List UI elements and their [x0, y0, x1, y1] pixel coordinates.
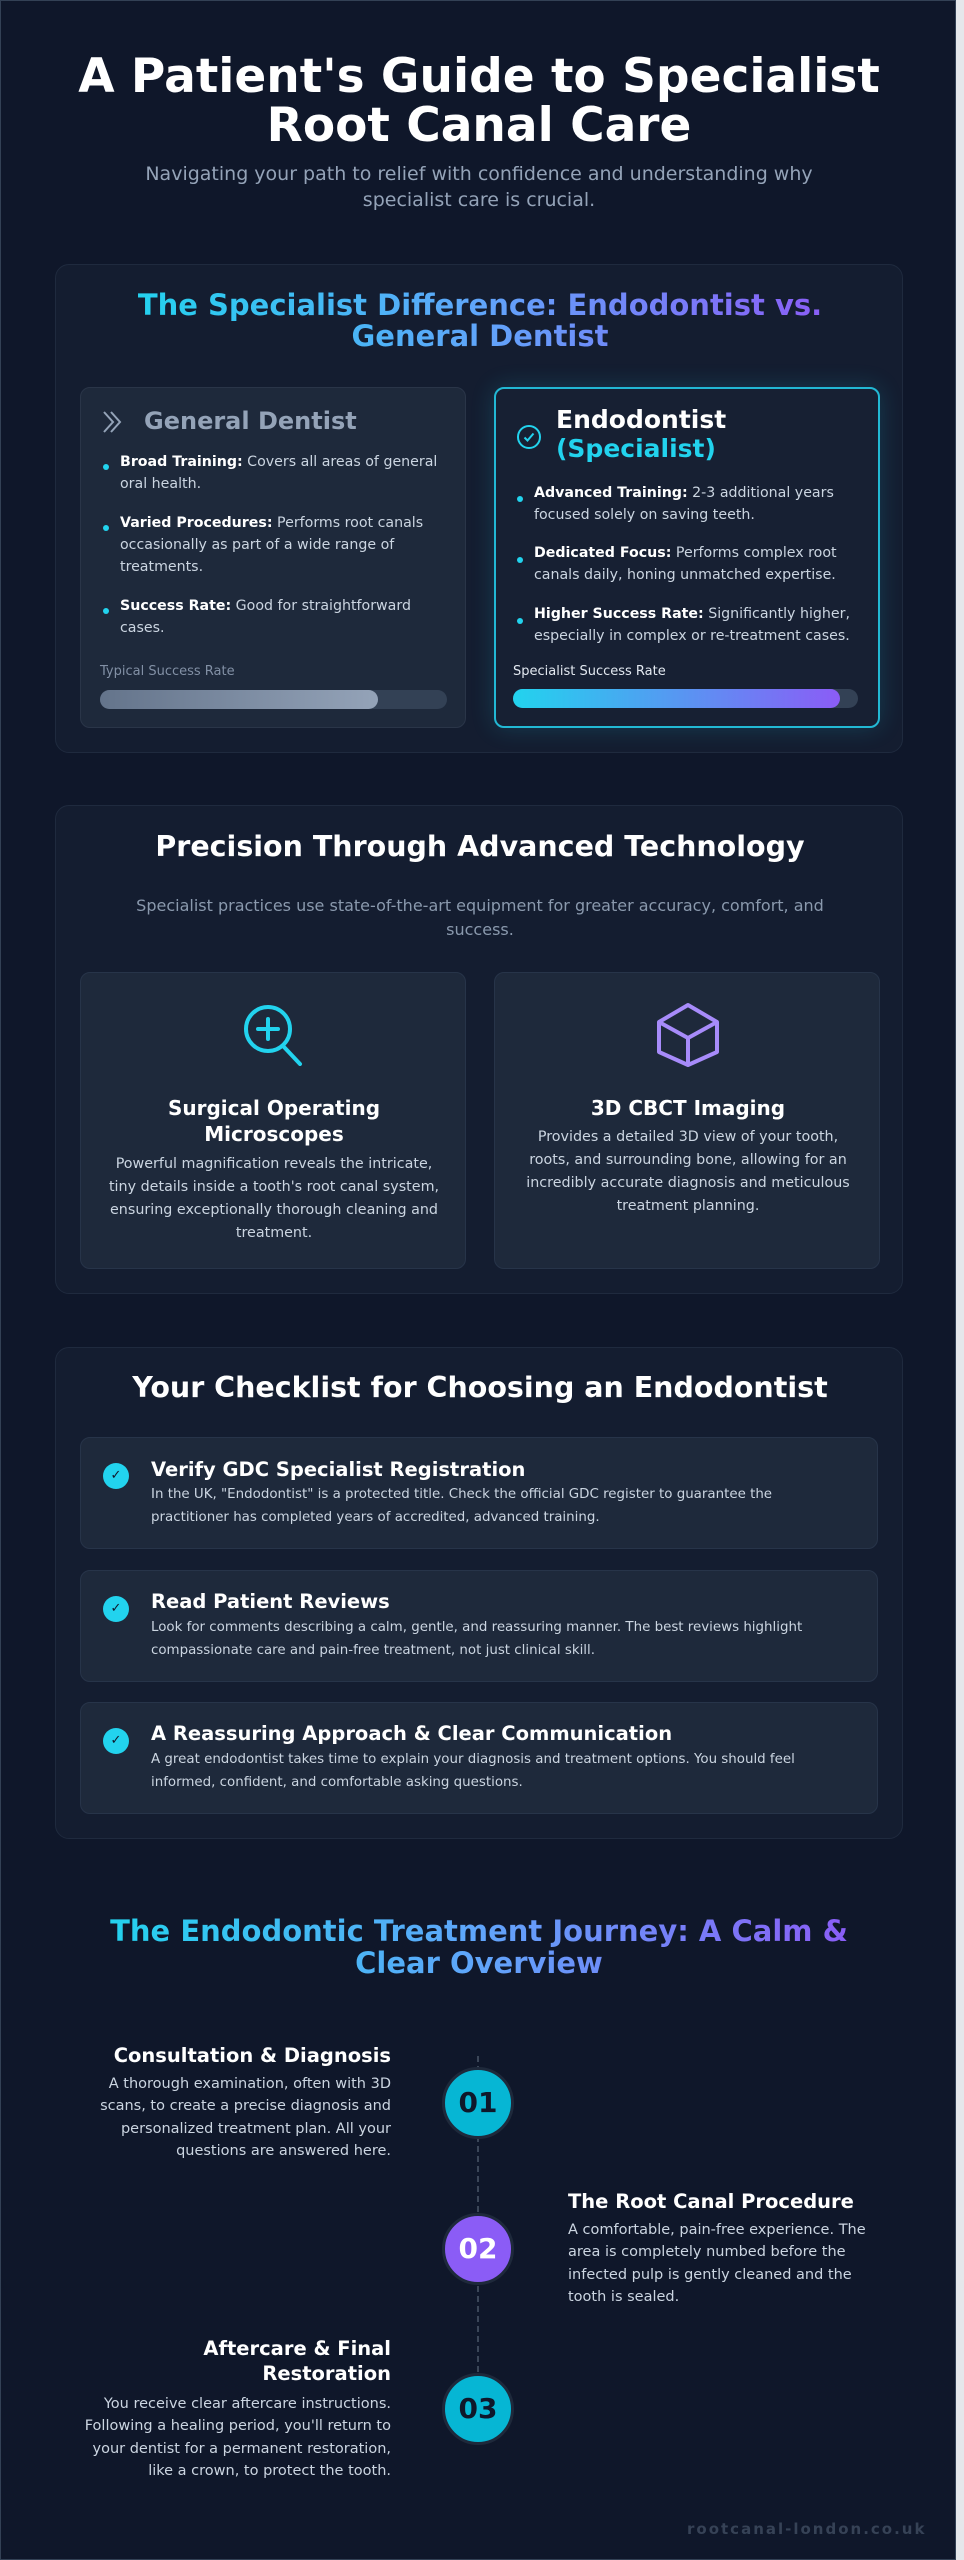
icon: check circle — [517, 425, 541, 449]
step 3: your dentist for a permanent restoration, — [93, 2441, 391, 2457]
bar: specialist success — [513, 664, 858, 708]
bar: typical success: Typical Success Rate — [100, 664, 235, 679]
title: Root Canal Care — [267, 98, 691, 153]
bullets: occasionally as part of a wide range of — [120, 537, 394, 553]
step 3: Restoration — [262, 2362, 391, 2385]
checklist item 1: practitioner has completed years of accredited, advanced training. — [151, 1510, 600, 1525]
checklist item 3: ✓ — [111, 1733, 121, 1748]
checklist item 3: A great endodontist takes time to explain your diagnosis and treatment options. You should feel — [151, 1752, 795, 1767]
card: microscopes — [80, 972, 466, 1269]
icon: cube — [657, 1003, 719, 1067]
card title: General Dentist — [144, 407, 357, 435]
card description: Provides a detailed 3D view of your tooth, — [538, 1129, 838, 1145]
step 2: A comfortable, pain-free experience. The — [568, 2222, 866, 2238]
technology subtitle: success. — [446, 920, 514, 939]
card title: Microscopes — [204, 1122, 344, 1146]
step 1: personalized treatment plan. All your — [121, 2121, 391, 2137]
step 3 — [85, 2337, 391, 2479]
step 1: questions are answered here. — [176, 2143, 391, 2159]
step 2: area is completely numbed before the — [568, 2244, 846, 2260]
card description — [526, 1129, 850, 1214]
heading: treatment journey: Clear Overview — [355, 1946, 603, 1980]
checklist item 2: Read Patient Reviews — [151, 1590, 390, 1613]
title — [78, 49, 880, 153]
checklist item 3 — [80, 1702, 878, 1814]
step 2: infected pulp is gently cleaned and the — [568, 2267, 852, 2283]
step 1: A thorough examination, often with 3D — [109, 2076, 391, 2092]
checklist item 1: Verify GDC Specialist Registration — [151, 1458, 525, 1481]
bullets: canals daily, honing unmatched expertise. — [534, 567, 836, 583]
checklist item 2: ✓ — [111, 1601, 121, 1616]
card title: 3D CBCT Imaging — [591, 1096, 785, 1120]
technology subtitle — [136, 896, 824, 939]
bullets — [103, 454, 437, 636]
panel: technology — [55, 805, 903, 1294]
checklist item 2 — [80, 1570, 878, 1682]
checklist item 1: In the UK, "Endodontist" is a protected title. Check the official GDC register to guarantee the — [151, 1487, 772, 1502]
footer: rootcanal-london.co.uk — [687, 2520, 926, 2538]
bullets: Success Rate: Good for straightforward — [120, 598, 411, 614]
checklist item 3: A Reassuring Approach & Clear Communication — [151, 1722, 672, 1745]
checklist item 3: informed, confident, and comfortable asking questions. — [151, 1775, 523, 1790]
bar: specialist success: Specialist Success Rate — [513, 664, 666, 679]
bullets — [517, 485, 850, 644]
bullets: treatments. — [120, 559, 203, 575]
step 2 — [568, 2190, 866, 2305]
card title — [168, 1096, 380, 1146]
checklist item 1 — [80, 1437, 878, 1549]
card description: ensuring exceptionally thorough cleaning and — [110, 1202, 438, 1218]
heading: technology: Precision Through Advanced Technology — [155, 830, 805, 863]
heading: treatment journey — [101, 1915, 857, 1979]
circle 03 — [442, 2373, 514, 2445]
heading: treatment journey: The Endodontic Treatment Journey: A Calm & — [110, 1914, 848, 1948]
heading: specialist difference: The Specialist Difference: Endodontist vs. — [138, 288, 822, 322]
subtitle: Navigating your path to relief with confidence and understanding why — [145, 163, 813, 185]
card description: treatment planning. — [617, 1198, 759, 1214]
checklist item 2: Look for comments describing a calm, gentle, and reassuring manner. The best reviews highlight — [151, 1620, 802, 1635]
technology subtitle: Specialist practices use state-of-the-art equipment for greater accuracy, comfort, and — [136, 896, 824, 915]
checklist item 2: compassionate care and pain-free treatment, not just clinical skill. — [151, 1643, 595, 1658]
step 3: You receive clear aftercare instructions. — [104, 2396, 391, 2412]
bullets: oral health. — [120, 476, 201, 492]
heading: specialist difference — [126, 290, 834, 352]
card title: Surgical Operating — [168, 1096, 380, 1120]
card description: roots, and surrounding bone, allowing for an — [529, 1152, 847, 1168]
card description: incredibly accurate diagnosis and meticulous — [526, 1175, 850, 1191]
heading: specialist difference: General Dentist — [351, 319, 608, 353]
card title — [556, 405, 726, 463]
card: endodontist — [494, 387, 880, 728]
bullets: Broad Training: Covers all areas of general — [120, 454, 437, 470]
subtitle — [145, 163, 813, 211]
step 1 — [100, 2044, 391, 2159]
circle 02 — [442, 2213, 514, 2285]
bullets: Varied Procedures: Performs root canals — [120, 515, 423, 531]
card title: (Specialist) — [556, 434, 716, 463]
step 2: The Root Canal Procedure — [568, 2190, 854, 2213]
circle 02: 02 — [459, 2232, 497, 2265]
icon: chevrons — [103, 412, 122, 432]
card description: tiny details inside a tooth's root canal system, — [109, 1179, 439, 1195]
panel: specialist difference — [55, 264, 903, 753]
step 3: Following a healing period, you'll return to — [85, 2418, 391, 2434]
circle 01: 01 — [459, 2086, 497, 2119]
card description — [109, 1156, 439, 1241]
bar: typical success — [100, 664, 447, 709]
bullets: cases. — [120, 620, 165, 636]
bullets: Higher Success Rate: Significantly higher, — [534, 606, 850, 622]
bullets: Advanced Training: 2-3 additional years — [534, 485, 834, 501]
card description: Powerful magnification reveals the intricate, — [116, 1156, 432, 1172]
circle 03: 03 — [459, 2392, 497, 2425]
checklist item 1: ✓ — [111, 1468, 121, 1483]
card: CBCT — [494, 972, 880, 1269]
card title: Endodontist — [556, 405, 726, 434]
bullets: focused solely on saving teeth. — [534, 507, 755, 523]
panel: checklist — [55, 1347, 903, 1839]
subtitle: specialist care is crucial. — [363, 189, 595, 211]
heading: checklist: Your Checklist for Choosing an Endodontist — [132, 1371, 828, 1404]
step 2: tooth is sealed. — [568, 2289, 679, 2305]
icon: magnifier — [244, 1005, 302, 1066]
circle 01 — [442, 2067, 514, 2139]
card description: treatment. — [236, 1225, 312, 1241]
step 1: Consultation & Diagnosis — [114, 2044, 391, 2067]
step 3: Aftercare & Final — [203, 2337, 391, 2360]
bullets: especially in complex or re-treatment cases. — [534, 628, 850, 644]
bullets: Dedicated Focus: Performs complex root — [534, 545, 837, 561]
step 1: scans, to create a precise diagnosis and — [100, 2098, 391, 2114]
timeline line — [477, 2056, 479, 2372]
title: A Patient's Guide to Specialist — [78, 49, 880, 104]
step 3: like a crown, to protect the tooth. — [148, 2463, 391, 2479]
card: general dentist — [80, 387, 466, 728]
